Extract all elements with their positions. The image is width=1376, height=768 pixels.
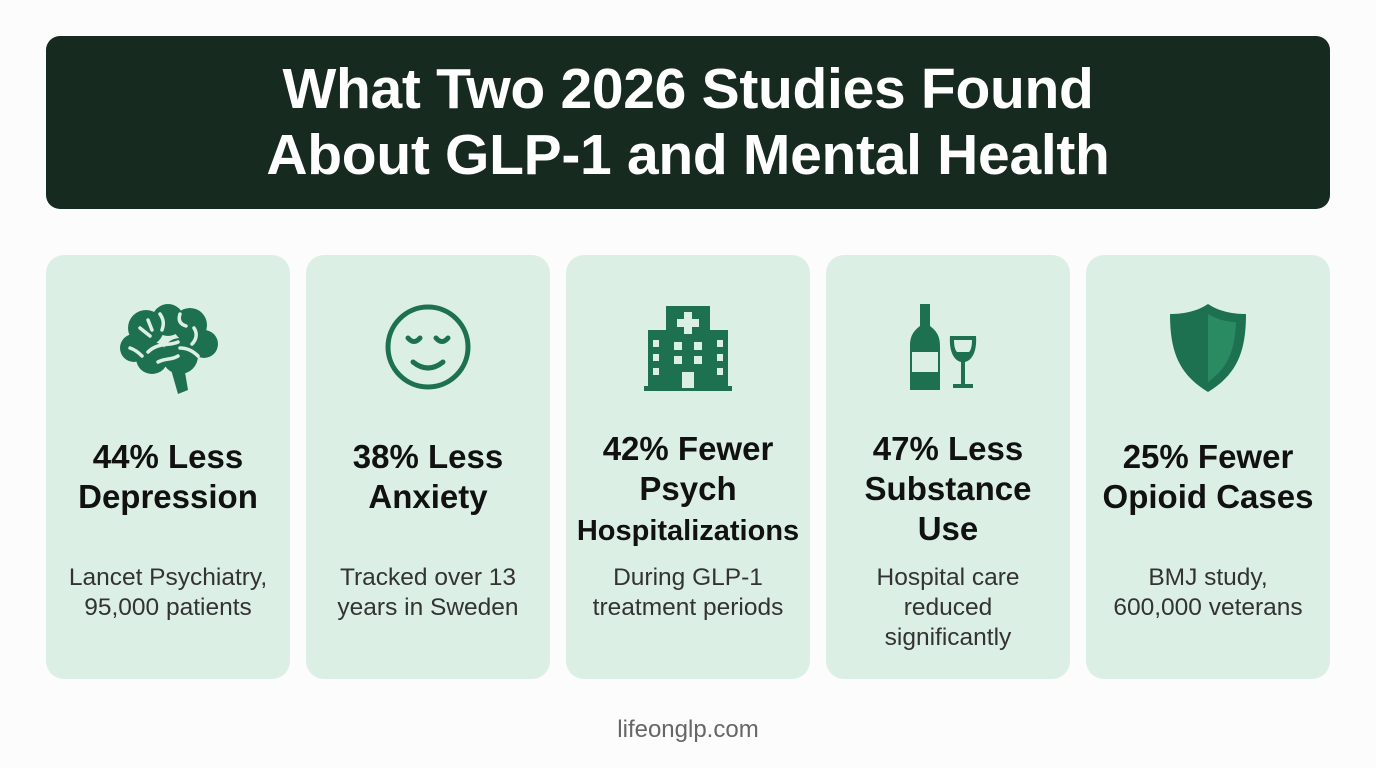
description (337, 564, 519, 621)
title: What Two 2026 Studies Found (282, 57, 1094, 121)
description: treatment periods (593, 594, 783, 621)
panel: depression (46, 255, 290, 679)
headline: Anxiety (368, 478, 488, 515)
description: Lancet Psychiatry, (69, 564, 267, 591)
description: Tracked over 13 (340, 564, 516, 591)
description (69, 564, 267, 621)
headline: Psych (639, 470, 737, 507)
icon: bottle and glass (910, 304, 976, 390)
headline: Hospitalizations (577, 515, 799, 547)
headline: 42% Fewer (603, 430, 773, 467)
footer: lifeonglp.com (617, 716, 759, 743)
headline (78, 438, 258, 515)
description: reduced (904, 594, 992, 621)
panel: substance use (826, 255, 1070, 679)
description (876, 564, 1019, 651)
description (1113, 564, 1303, 621)
description: BMJ study, (1148, 564, 1268, 591)
headline: 25% Fewer (1123, 438, 1293, 475)
headline (1103, 438, 1313, 515)
icon: brain (120, 304, 218, 394)
description: significantly (885, 624, 1011, 651)
title: About GLP-1 and Mental Health (266, 123, 1110, 187)
headline: Depression (78, 478, 258, 515)
headline (577, 430, 799, 547)
headline (865, 430, 1031, 547)
description: During GLP-1 (613, 564, 763, 591)
headline: Use (918, 510, 978, 547)
panel: hospitalizations (566, 255, 810, 679)
icon: calm face (386, 304, 470, 390)
panel: anxiety (306, 255, 550, 679)
headline (353, 438, 503, 515)
headline: 38% Less (353, 438, 503, 475)
description (593, 564, 783, 621)
title (46, 36, 1330, 209)
headline: 47% Less (873, 430, 1023, 467)
description: Hospital care (876, 564, 1019, 591)
headline: Substance (865, 470, 1031, 507)
description: 600,000 veterans (1113, 594, 1303, 621)
icon: hospital (644, 306, 732, 391)
panel: opioid (1086, 255, 1330, 679)
headline: 44% Less (93, 438, 243, 475)
headline: Opioid Cases (1103, 478, 1313, 515)
icon: shield (1170, 304, 1246, 392)
description: years in Sweden (337, 594, 519, 621)
description: 95,000 patients (84, 594, 252, 621)
